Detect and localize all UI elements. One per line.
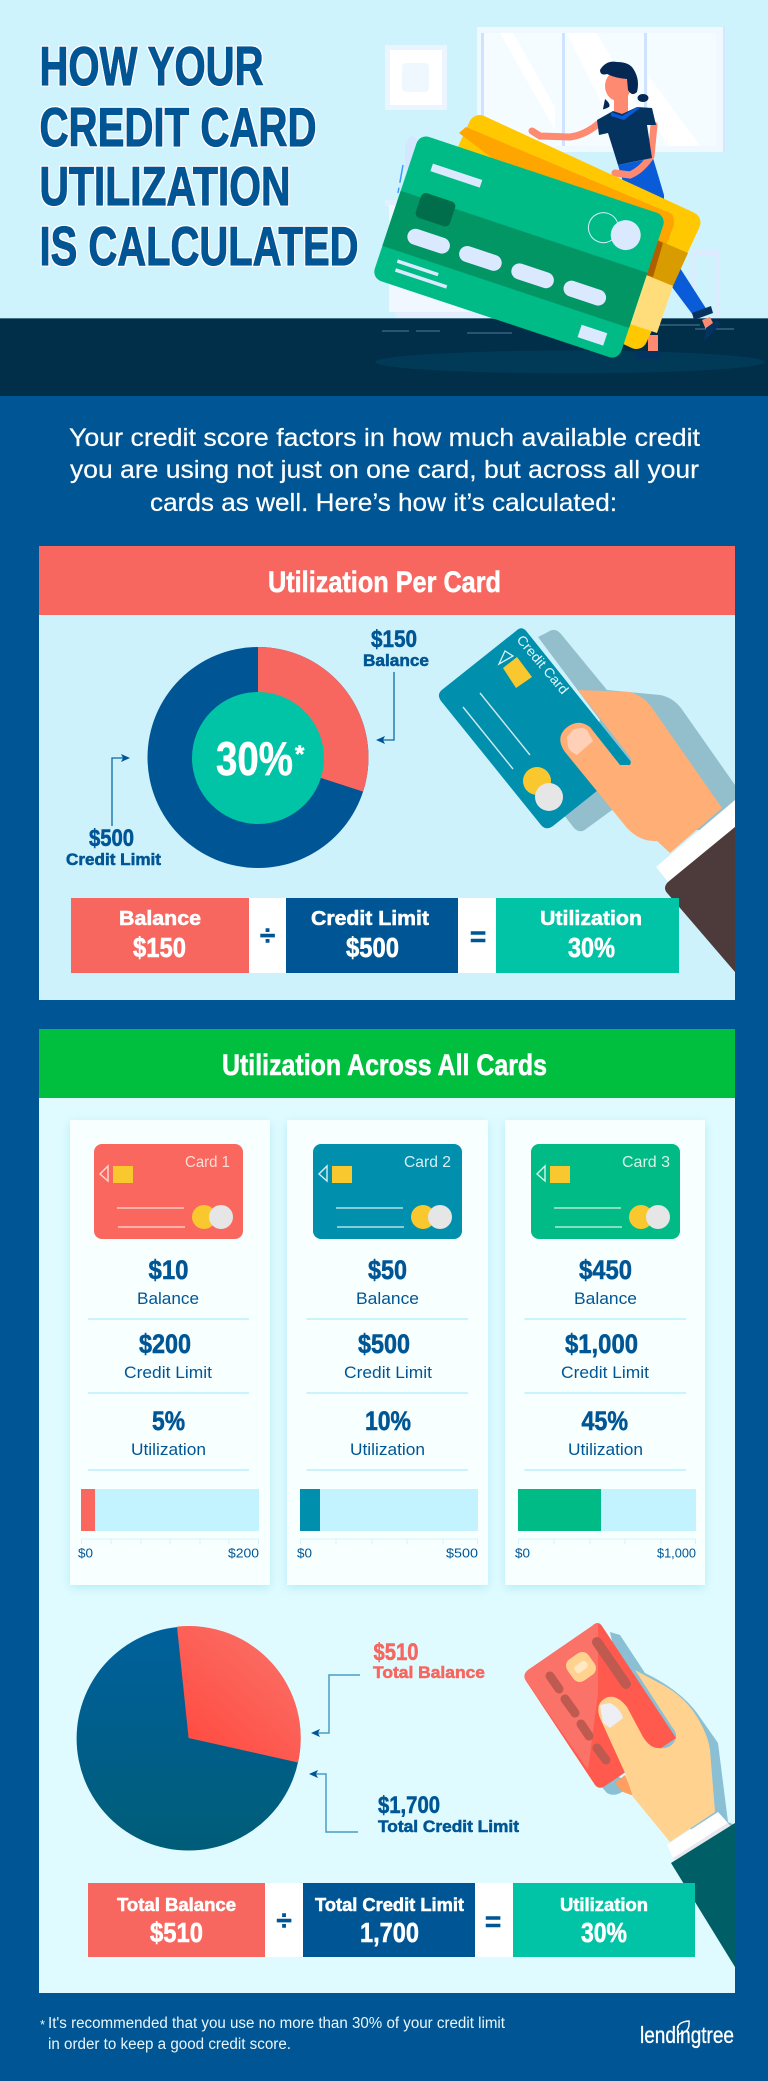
bar chart: $0 — [78, 1546, 93, 1560]
icon: card 1: Card 1 — [185, 1154, 230, 1171]
stats: Credit Limit — [561, 1363, 649, 1382]
panel header — [39, 546, 735, 615]
stats: $50 — [368, 1255, 407, 1285]
stats: 45% — [582, 1406, 628, 1436]
floor and shadow — [0, 318, 768, 396]
bar chart: $500 — [446, 1546, 478, 1560]
formula: balance / credit limit = utilization: = — [470, 921, 486, 952]
panel header: Utilization Per Card — [268, 566, 501, 599]
formula: total balance / total credit limit = utilization: Utilization — [560, 1895, 648, 1915]
stats: 10% — [365, 1406, 411, 1436]
callout: credit limit: Credit Limit — [66, 850, 161, 869]
stats — [306, 1255, 468, 1471]
bar chart: $0 — [297, 1546, 312, 1560]
stats: 5% — [152, 1406, 185, 1436]
title: UTILIZATION — [40, 155, 290, 217]
callout: total credit limit — [309, 1770, 519, 1836]
panel: utilization per card — [39, 546, 735, 1000]
formula: total balance / total credit limit = utilization: Total Credit Limit — [315, 1895, 464, 1915]
callout: total credit limit: Total Credit Limit — [378, 1817, 519, 1836]
panel header — [39, 1029, 735, 1098]
stats — [524, 1255, 686, 1471]
panel header: Utilization Across All Cards — [222, 1049, 547, 1082]
callout: balance: Balance — [363, 651, 429, 670]
formula: balance / credit limit = utilization: ÷ — [260, 920, 275, 951]
stats: Credit Limit — [344, 1363, 432, 1382]
title: CREDIT CARD — [40, 96, 316, 158]
title — [40, 35, 358, 277]
stats: $10 — [148, 1255, 188, 1285]
callout: total balance: Total Balance — [373, 1663, 485, 1682]
card column 1 — [70, 1120, 270, 1585]
illustration: woman pushing cards — [532, 62, 721, 359]
formula: balance / credit limit = utilization — [71, 898, 679, 973]
formula: balance / credit limit = utilization: Balance — [119, 908, 201, 930]
formula: balance / credit limit = utilization: $500 — [346, 932, 399, 963]
formula: balance / credit limit = utilization: 30% — [568, 932, 615, 963]
bar chart: $200 — [228, 1546, 259, 1560]
footnote — [40, 2015, 506, 2053]
stats: $450 — [579, 1255, 632, 1285]
stats — [88, 1255, 249, 1471]
stats: Credit Limit — [124, 1363, 212, 1382]
panel body — [39, 546, 735, 1000]
stats: Utilization — [350, 1440, 425, 1459]
footnote: * — [40, 2017, 45, 2032]
stats: Utilization — [131, 1440, 206, 1459]
formula: total balance / total credit limit = utilization: 1,700 — [360, 1917, 419, 1948]
callout: total credit limit: $1,700 — [378, 1792, 440, 1819]
stats: Balance — [137, 1289, 199, 1308]
header illustration: room scene — [0, 0, 768, 318]
callout: credit limit — [66, 754, 161, 869]
footnote: in order to keep a good credit score. — [48, 2036, 291, 2053]
formula: total balance / total credit limit = utilization: Total Balance — [117, 1895, 236, 1915]
panel body — [39, 1029, 735, 1993]
illustration: hand holding teal card: Credit Card — [514, 632, 571, 697]
stats: $1,000 — [565, 1329, 638, 1359]
bar chart — [297, 1489, 478, 1560]
intro text: Your credit score factors in how much available credit — [69, 424, 700, 452]
intro text: you are using not just on one card, but across all your — [70, 456, 699, 484]
formula: balance / credit limit = utilization: Credit Limit — [311, 908, 429, 930]
formula: total balance / total credit limit = utilization — [88, 1883, 695, 1957]
formula: total balance / total credit limit = utilization: $510 — [150, 1917, 203, 1948]
card column 2 — [287, 1120, 488, 1585]
intro text: cards as well. Here’s how it’s calculated: — [150, 489, 617, 517]
illustration: hand holding coral card — [524, 1623, 735, 1967]
card column 3 — [505, 1120, 705, 1585]
icon: card 1 — [94, 1144, 243, 1239]
stats: Balance — [356, 1289, 419, 1308]
callout: total balance — [311, 1639, 485, 1737]
stats: $500 — [358, 1329, 410, 1359]
stats: Utilization — [568, 1440, 643, 1459]
icon: card 2 — [313, 1144, 462, 1239]
formula: balance / credit limit = utilization: Utilization — [540, 908, 642, 930]
callout: balance — [363, 626, 429, 744]
bar chart: $0 — [515, 1546, 530, 1560]
title: IS CALCULATED — [40, 215, 358, 277]
callout: credit limit: $500 — [89, 825, 134, 852]
pie chart — [77, 1626, 301, 1850]
logo: lendingtree: lendingtree — [640, 2022, 734, 2048]
bar chart: $1,000 — [657, 1546, 696, 1560]
illustration: green front card — [372, 134, 666, 360]
formula: total balance / total credit limit = utilization: 30% — [581, 1917, 627, 1948]
icon: card 2: Card 2 — [404, 1154, 451, 1171]
stats: Balance — [574, 1289, 637, 1308]
stats: $200 — [139, 1329, 191, 1359]
donut chart — [148, 647, 368, 868]
bar chart — [78, 1489, 259, 1560]
footnote: It's recommended that you use no more than 30% of your credit limit — [48, 2015, 506, 2032]
icon: card 3 — [531, 1144, 680, 1239]
donut chart: 30% — [216, 732, 293, 785]
icon: card 3: Card 3 — [622, 1154, 670, 1171]
intro text — [69, 424, 700, 517]
panel: utilization across all cards — [39, 1029, 735, 1993]
illustration: hand holding teal card — [439, 628, 735, 972]
formula: total balance / total credit limit = utilization: = — [485, 1906, 501, 1937]
formula: balance / credit limit = utilization: $150 — [133, 932, 186, 963]
bar chart — [515, 1489, 696, 1560]
title: HOW YOUR — [40, 35, 264, 97]
donut chart: * — [295, 741, 305, 768]
illustration: yellow back card — [412, 111, 704, 353]
formula: total balance / total credit limit = utilization: ÷ — [276, 1905, 292, 1936]
callout: balance: $150 — [371, 626, 417, 653]
callout: total balance: $510 — [374, 1639, 418, 1666]
